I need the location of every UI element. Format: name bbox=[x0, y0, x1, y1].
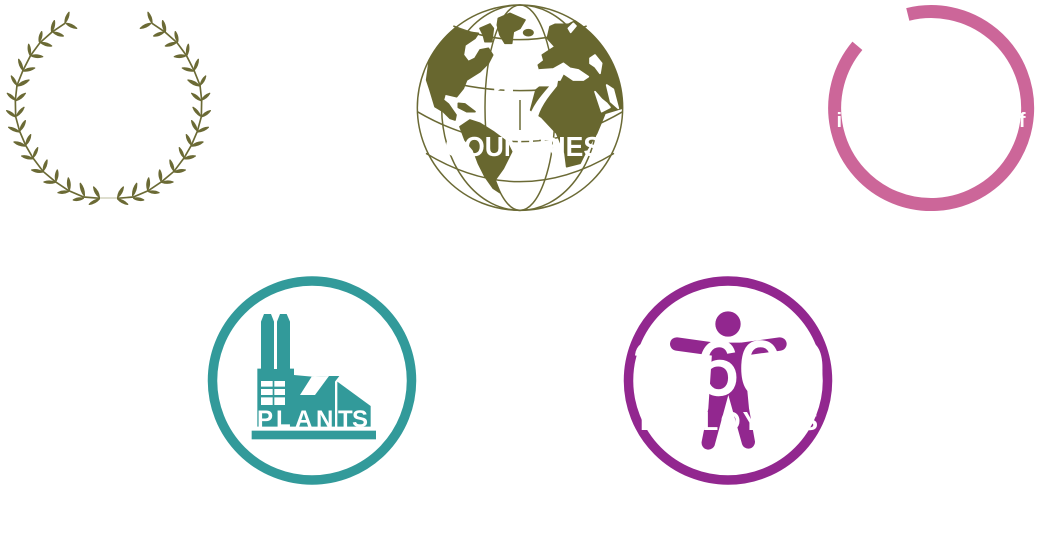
globe: countries bbox=[417, 5, 623, 210]
laurel wreath bbox=[7, 12, 210, 204]
icon: person bbox=[677, 311, 780, 450]
purple ring bbox=[628, 281, 828, 480]
globe number: 1 bbox=[490, 67, 524, 136]
globe number: 7 bbox=[517, 66, 563, 136]
employees label: EMPLOYEES bbox=[640, 406, 818, 436]
pink ring panel bbox=[835, 12, 1028, 205]
teal ring bbox=[212, 281, 412, 480]
ring arc bbox=[835, 12, 1028, 205]
globe label: COUNTRIES bbox=[445, 131, 601, 162]
ring label left: in bbox=[836, 110, 854, 132]
globe number bbox=[490, 66, 563, 136]
employees number: 3,600 bbox=[632, 326, 825, 412]
centre meridian bbox=[519, 100, 521, 130]
left laurel branch bbox=[7, 12, 100, 204]
plants label: PLANTS bbox=[257, 406, 368, 433]
wreath tie bbox=[100, 197, 117, 199]
person badge: employees bbox=[628, 281, 828, 480]
globe grid bbox=[417, 5, 623, 210]
factory windows bbox=[261, 381, 285, 405]
icon: factory bbox=[252, 314, 376, 439]
factory badge: plants bbox=[212, 281, 412, 480]
continents bbox=[427, 13, 622, 193]
ring label right: of bbox=[1007, 110, 1026, 132]
right laurel branch bbox=[117, 12, 210, 204]
